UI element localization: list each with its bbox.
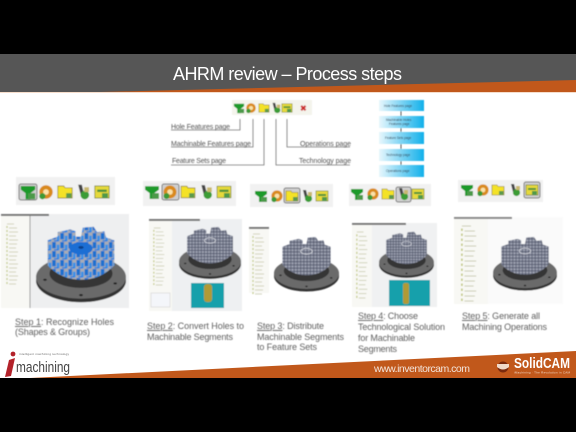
iMachining logo xyxy=(5,352,70,377)
caption: step 1 xyxy=(15,317,114,337)
label: technology: Technology page xyxy=(299,158,351,165)
label: machinable features: Machinable Features page xyxy=(171,141,251,148)
flowchart of pages: Machinable Holes xyxy=(386,118,412,122)
website: www.inventorcam.com xyxy=(373,363,470,375)
toolbar: step 3 xyxy=(250,184,333,207)
footer band xyxy=(30,351,576,378)
caption: step 2: Machinable Segments xyxy=(147,332,234,342)
caption: step 1: Step 1: Recognize Holes xyxy=(15,317,114,327)
caption: step 3: to Feature Sets xyxy=(257,342,318,352)
flowchart of pages: Feature Sets page xyxy=(385,136,411,140)
caption: step 2 xyxy=(147,321,244,342)
label: feature sets: Feature Sets page xyxy=(172,158,226,165)
flowchart of pages: Operations page xyxy=(386,169,410,173)
slide white area xyxy=(0,54,576,378)
toolbar: step 2 xyxy=(143,181,236,206)
inset section view xyxy=(389,280,430,306)
label: hole features: Hole Features page xyxy=(171,124,230,131)
iMachining logo: intelligent machining technology xyxy=(19,352,70,356)
title banner xyxy=(0,54,576,93)
toolbar: step 5 xyxy=(458,180,543,202)
caption: step 2: Step 2: Convert Holes to xyxy=(147,321,244,331)
caption: step 4 xyxy=(358,311,445,354)
SolidCAM logo xyxy=(497,356,570,374)
caption: step 5: Step 5: Generate all xyxy=(462,311,540,321)
caption: step 1: (Shapes & Groups) xyxy=(15,327,90,337)
flowchart of pages: Features page xyxy=(389,122,410,126)
screenshot: step 3 feature sets xyxy=(249,227,339,294)
caption: step 3: Machinable Segments xyxy=(257,332,344,342)
caption: step 5 xyxy=(462,311,548,332)
screenshot: step 4 technological solution xyxy=(352,223,437,307)
flowchart of pages: Technology page xyxy=(386,153,410,157)
screenshot: step 2 machinable segments xyxy=(149,219,242,311)
toolbar: step 1 xyxy=(16,177,115,205)
caption: step 4: for Machinable xyxy=(358,333,415,343)
main toolbar with page labels xyxy=(171,100,351,165)
toolbar: step 4 xyxy=(349,184,431,206)
screenshot: step 1 recognized holes (blue) xyxy=(1,214,129,308)
caption: step 4: Step 4: Choose xyxy=(358,311,418,321)
main toolbar with page labels: ✖ xyxy=(300,104,307,113)
caption: step 5: Machining Operations xyxy=(462,322,548,332)
screenshot: step 5 machining operations xyxy=(454,217,563,304)
caption: step 4: Technological Solution xyxy=(358,322,445,332)
caption: step 4: Segments xyxy=(358,344,398,354)
inset section view xyxy=(191,283,224,308)
caption: step 3 xyxy=(257,321,344,352)
flowchart of pages xyxy=(379,100,424,177)
label: operations: Operations page xyxy=(300,141,351,148)
iMachining logo: machining xyxy=(16,359,70,376)
SolidCAM logo: iMachining · The Revolution in CAM xyxy=(514,370,570,374)
title: AHRM review – Process steps xyxy=(173,64,402,84)
flowchart of pages: Hole Features page xyxy=(384,104,412,108)
caption: step 3: Step 3: Distribute xyxy=(257,321,324,331)
